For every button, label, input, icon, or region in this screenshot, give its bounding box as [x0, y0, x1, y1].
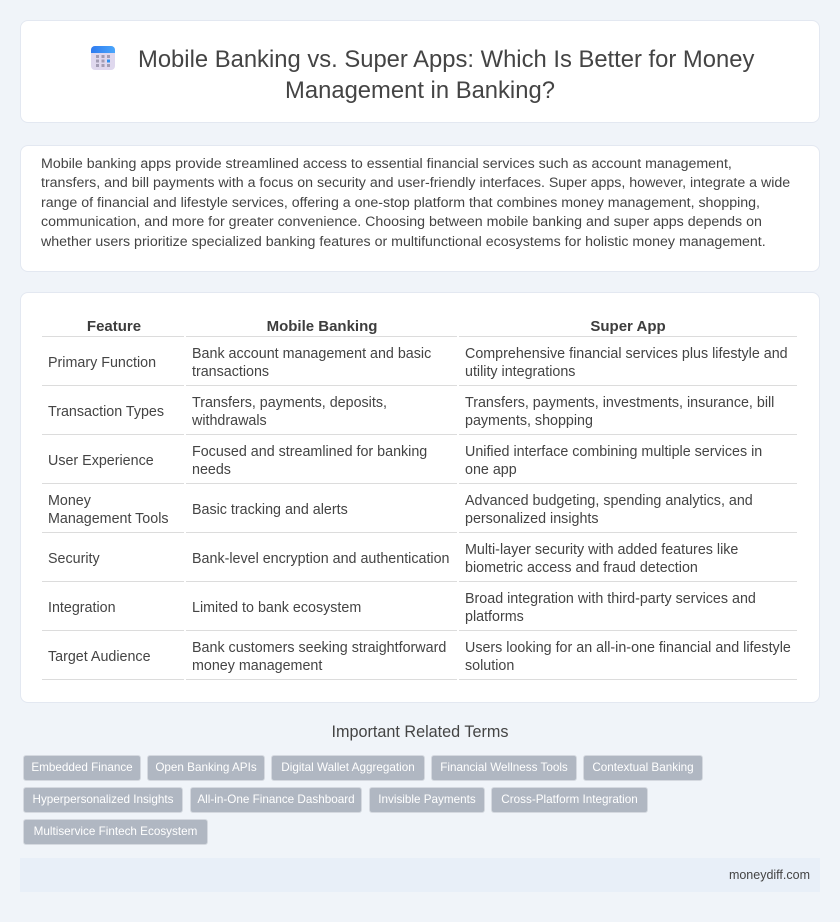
tag [23, 819, 208, 845]
row: integration: Broad integration with third-party services and [465, 591, 756, 607]
table header: Feature [87, 318, 141, 335]
related terms tags [23, 755, 703, 845]
tag [23, 787, 183, 813]
intro panel [20, 145, 820, 272]
comparison table [42, 318, 797, 680]
row: security: biometric access and fraud detection [465, 560, 698, 576]
title: Mobile Banking vs. Super Apps: Which Is Better for Money [138, 46, 754, 73]
row: user experience [48, 444, 762, 478]
row: money management tools: Money [48, 493, 91, 509]
row: transaction types: Transfers, payments, investments, insurance, bill [465, 395, 774, 411]
row: money management tools: Advanced budgeting, spending analytics, and [465, 493, 753, 509]
intro text: range of financial and lifestyle services, offering a one-stop platform that combines money management, shopping, [41, 194, 760, 210]
row: transaction types: Transfers, payments, deposits, [192, 395, 387, 411]
intro text: Mobile banking apps provide streamlined access to essential financial services such as account management, [41, 156, 732, 172]
row: primary function: utility integrations [465, 364, 575, 380]
row: primary function [48, 346, 788, 380]
row: integration: platforms [465, 609, 524, 625]
tag [147, 755, 265, 781]
footer bar [20, 858, 820, 892]
row: money management tools: personalized insights [465, 511, 599, 527]
row: integration [48, 591, 756, 625]
table header: Super App [590, 318, 666, 335]
row: transaction types: Transaction Types [48, 404, 164, 420]
row: target audience: Bank customers seeking straightforward [192, 640, 446, 656]
tag: Financial Wellness Tools [440, 761, 568, 774]
tag: Embedded Finance [31, 761, 133, 774]
title: Management in Banking? [285, 77, 555, 104]
tag [583, 755, 703, 781]
tag [369, 787, 485, 813]
row: security: Multi-layer security with added features like [465, 542, 738, 558]
row: primary function: Primary Function [48, 355, 156, 371]
panel: comparison table [20, 292, 820, 703]
tag [271, 755, 425, 781]
footer source: moneydiff.com [729, 868, 810, 882]
header panel [20, 20, 820, 123]
tag: All-in-One Finance Dashboard [197, 793, 355, 806]
row: target audience: money management [192, 658, 322, 674]
tag: Hyperpersonalized Insights [32, 793, 173, 806]
intro text: whether users prioritize specialized banking features or multifunctional ecosystems for holistic money management. [41, 234, 766, 250]
intro text: transfers, and bill payments with a focus on security and user-friendly interfaces. Super apps, however, integrate a wide [41, 175, 790, 191]
row: user experience: needs [192, 462, 231, 478]
row: primary function: transactions [192, 364, 269, 380]
row: security [48, 542, 738, 576]
row: security: Security [48, 551, 100, 567]
row: user experience: User Experience [48, 453, 154, 469]
intro text: communication, and more for greater convenience. Choosing between mobile banking and super apps depends on [41, 214, 762, 230]
row: target audience: solution [465, 658, 514, 674]
row: primary function: Bank account management and basic [192, 346, 431, 362]
title [138, 46, 754, 104]
tag [190, 787, 362, 813]
tag [431, 755, 577, 781]
tag: Cross-Platform Integration [501, 793, 638, 806]
tag: Invisible Payments [378, 793, 476, 806]
row: user experience: Unified interface combining multiple services in [465, 444, 762, 460]
row: target audience [48, 640, 791, 674]
row: target audience: Target Audience [48, 649, 151, 665]
row: transaction types: withdrawals [192, 413, 267, 429]
table header: Mobile Banking [267, 318, 377, 335]
row: transaction types: payments, shopping [465, 413, 593, 429]
intro text [41, 156, 790, 250]
row: transaction types [48, 395, 774, 429]
tag: Digital Wallet Aggregation [281, 761, 415, 774]
row: target audience: Users looking for an all-in-one financial and lifestyle [465, 640, 791, 656]
row: primary function: Comprehensive financial services plus lifestyle and [465, 346, 788, 362]
tag [491, 787, 648, 813]
row: money management tools: Management Tools [48, 511, 169, 527]
tag: Multiservice Fintech Ecosystem [34, 825, 197, 838]
row: money management tools: Basic tracking and alerts [192, 502, 348, 518]
tag: Open Banking APIs [155, 761, 257, 774]
tag [23, 755, 141, 781]
row: user experience: one app [465, 462, 517, 478]
heading: important related terms: Important Related Terms [332, 723, 508, 741]
table header [87, 318, 666, 335]
row: integration: Limited to bank ecosystem [192, 600, 361, 616]
row: integration: Integration [48, 600, 116, 616]
row: user experience: Focused and streamlined for banking [192, 444, 427, 460]
icon: calendar app [91, 46, 115, 70]
tag: Contextual Banking [592, 761, 694, 774]
row: money management tools [48, 493, 753, 527]
row: security: Bank-level encryption and authentication [192, 551, 450, 567]
